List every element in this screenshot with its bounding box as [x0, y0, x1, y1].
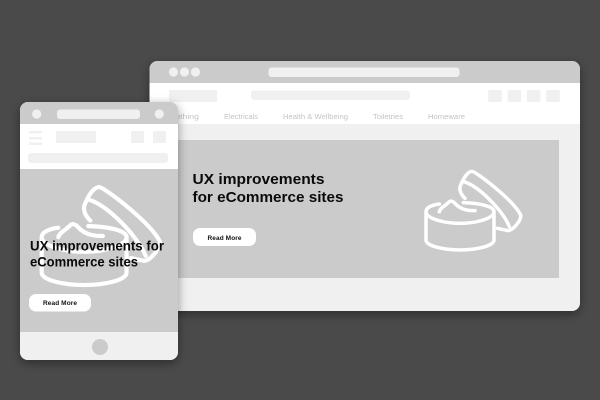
icon: desktop cream jar: [426, 171, 521, 250]
desktop navigation labels: [167, 112, 465, 121]
desktop search bar: [251, 90, 410, 100]
icon: mobile cream jar: [42, 187, 160, 285]
desktop heading: for eCommerce sites: [192, 189, 344, 206]
mobile hero banner: [20, 169, 178, 332]
mobile address bar: [57, 110, 140, 119]
mobile heading: eCommerce sites: [30, 254, 138, 270]
icon: hamburger menu: [29, 131, 42, 145]
panel: mobile device: [20, 102, 178, 360]
desktop title bar: [150, 61, 580, 83]
desktop read more button: Read More: [208, 235, 242, 242]
mobile footer bar: [20, 332, 178, 360]
desktop navigation labels: Toiletries: [373, 112, 403, 121]
mobile home button: [92, 339, 108, 355]
mobile search bar: [28, 153, 168, 163]
mobile heading: UX improvements for: [30, 238, 165, 254]
desktop logo placeholder: [169, 90, 217, 102]
desktop navigation labels: Electricals: [224, 112, 258, 121]
desktop window dots: [169, 67, 200, 77]
desktop navigation labels: Clothing: [167, 112, 199, 121]
desktop read more button: [193, 228, 256, 246]
desktop address bar: [268, 68, 460, 77]
mobile read more button: [29, 294, 91, 312]
mobile read more button: Read More: [43, 300, 77, 307]
desktop header strip: [150, 83, 580, 124]
mobile header icons: [131, 131, 166, 143]
desktop navigation labels: Health & Wellbeing: [283, 112, 348, 121]
desktop hero banner: [171, 140, 559, 278]
desktop navigation labels: Homeware: [428, 112, 465, 121]
desktop header icons: [488, 90, 560, 102]
mobile top dots: [32, 109, 164, 119]
panel: desktop browser: [150, 61, 580, 311]
desktop heading: UX improvements: [192, 171, 324, 188]
mobile logo placeholder: [56, 131, 96, 143]
mobile title bar: [20, 102, 178, 124]
